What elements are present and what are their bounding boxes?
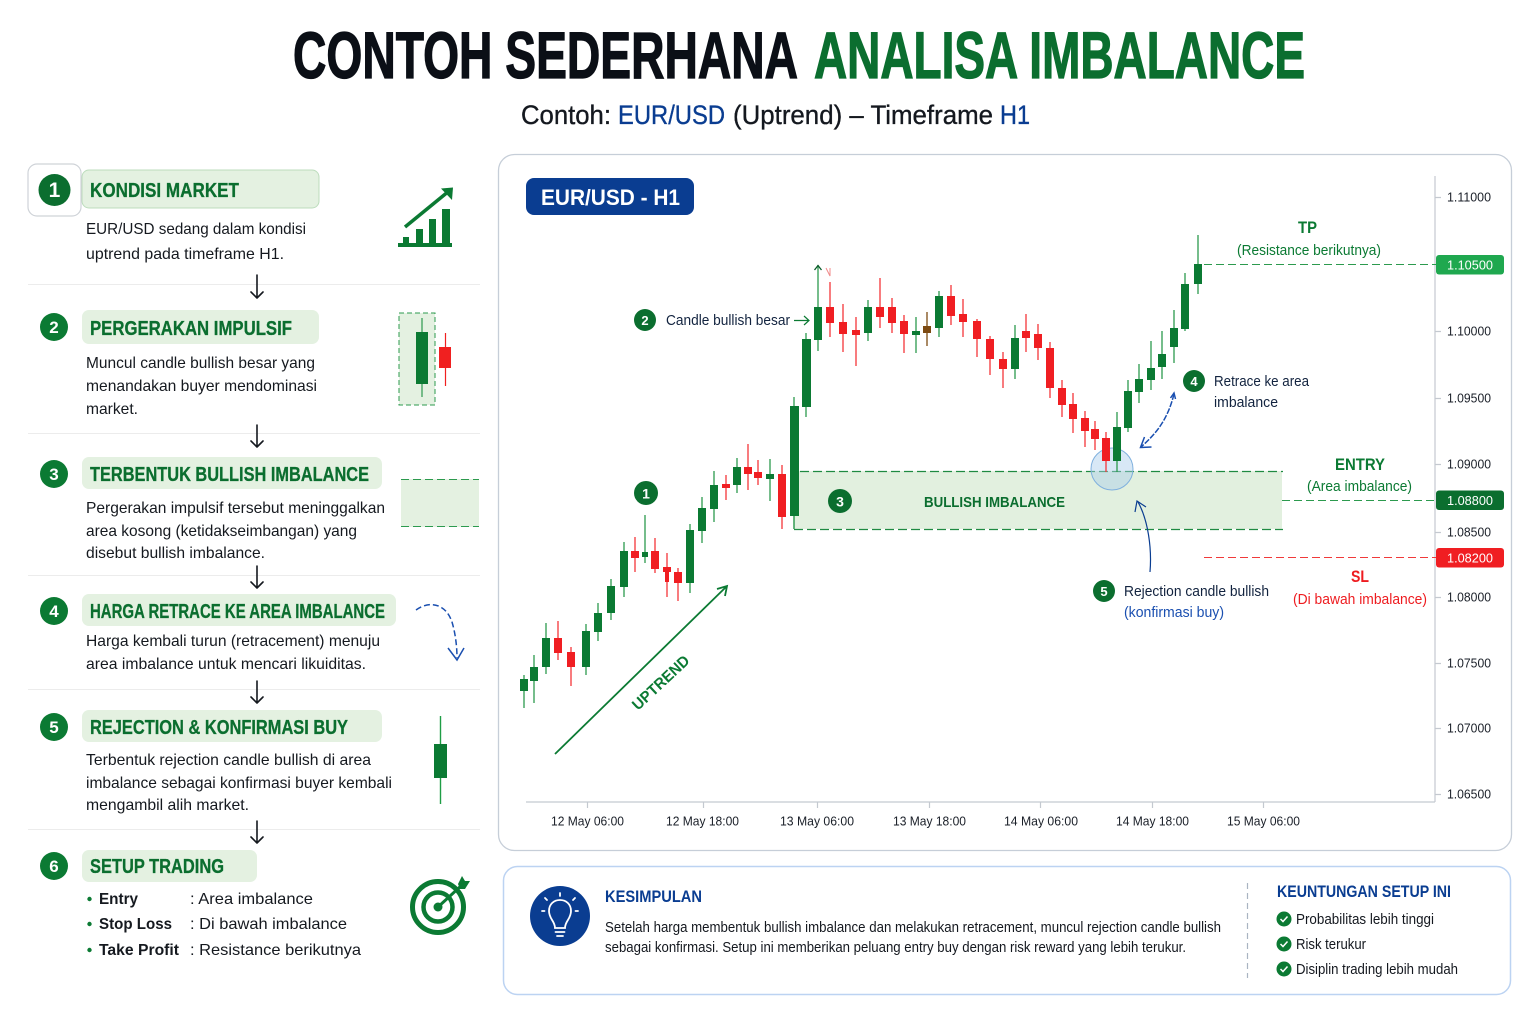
price axis: 1.09000	[1447, 456, 1491, 472]
title: CONTOH SEDERHANA	[293, 18, 798, 92]
annotation 1	[634, 481, 658, 505]
stop loss level: 1.08200	[1447, 550, 1493, 566]
step 1: kondisi market: uptrend pada timeframe H1.	[86, 246, 284, 263]
uptrend arrow and label	[555, 586, 727, 754]
benefits list	[1276, 882, 1458, 978]
step 5: rejection dan konfirmasi: imbalance sebagai konfirmasi buyer kembali	[86, 775, 392, 792]
step 6: setup trading: 6	[49, 857, 59, 876]
icon: retrace arrow	[416, 605, 464, 660]
step 4: harga retrace: Harga kembali turun (retracement) menuju	[86, 633, 380, 650]
annotation 4: retrace ke area imbalance: Retrace ke area	[1214, 374, 1310, 390]
panel: kesimpulan	[504, 866, 1510, 994]
step 3: terbentuk bullish imbalance	[40, 457, 385, 562]
conclusion text: KESIMPULAN	[605, 887, 702, 906]
step 3: terbentuk bullish imbalance: TERBENTUK BULLISH IMBALANCE	[90, 464, 369, 486]
step 6: setup trading: SETUP TRADING	[90, 856, 224, 878]
bullish imbalance zone: 3	[836, 494, 844, 510]
step 3: terbentuk bullish imbalance: 3	[49, 465, 59, 484]
step 4: harga retrace: 4	[49, 602, 59, 621]
icon: impulse candle	[399, 313, 451, 405]
candlestick chart	[520, 235, 1202, 708]
annotation 2: candle bullish besar: Candle bullish besar	[666, 313, 790, 329]
annotation 4: retrace ke area imbalance: 4	[1190, 374, 1198, 389]
icon: target	[412, 876, 470, 932]
price axis: 1.07500	[1447, 656, 1491, 670]
time axis: 13 May 06:00	[780, 814, 854, 828]
step 5: rejection dan konfirmasi: mengambil alih market.	[86, 797, 249, 814]
annotation 2: candle bullish besar: 2	[641, 313, 649, 328]
benefits list: Risk terukur	[1296, 937, 1366, 953]
step 5: rejection dan konfirmasi: REJECTION & KONFIRMASI BUY	[90, 717, 349, 739]
rejection highlight circle	[1091, 448, 1133, 490]
annotation 5: rejection candle bullish	[1093, 501, 1269, 621]
step 2: pergerakan impulsif: menandakan buyer mendominasi	[86, 378, 317, 395]
panel: langkah analisa	[28, 164, 480, 959]
annotation 5: rejection candle bullish: Rejection candle bullish	[1124, 584, 1269, 600]
price axis: 1.10000	[1447, 324, 1491, 338]
TP level: 1.10500	[1447, 258, 1493, 272]
step 5: rejection dan konfirmasi	[40, 710, 392, 814]
price axis	[1435, 176, 1491, 802]
step 5: rejection dan konfirmasi: 5	[49, 718, 59, 737]
step 6: setup trading: Entry	[99, 891, 138, 908]
conclusion text: sebagai konfirmasi. Setup ini memberikan peluang entry buy dengan risk reward yang lebih terukur.	[605, 940, 1186, 956]
price axis: 1.11000	[1447, 190, 1491, 204]
entry level	[1282, 455, 1504, 510]
conclusion text	[605, 887, 1221, 956]
entry level: (Area imbalance)	[1307, 479, 1412, 495]
arrow	[251, 425, 263, 447]
stop loss level: (Di bawah imbalance)	[1293, 592, 1427, 608]
icon: growth chart	[398, 188, 453, 247]
arrow	[251, 821, 263, 843]
subtitle	[521, 100, 1030, 130]
subtitle: H1	[1000, 100, 1030, 130]
price axis: 1.09500	[1447, 390, 1491, 406]
step 3: terbentuk bullish imbalance: Pergerakan impulsif tersebut meninggalkan	[86, 500, 385, 517]
annotation 5: rejection candle bullish: 5	[1100, 584, 1108, 599]
step 3: terbentuk bullish imbalance: area kosong (ketidakseimbangan) yang	[86, 523, 357, 540]
price axis: 1.08000	[1447, 590, 1491, 604]
step 6: setup trading: : Resistance berikutnya	[190, 942, 361, 959]
annotation 2: candle bullish besar	[634, 309, 809, 331]
step 4: harga retrace: HARGA RETRACE KE AREA IMBALANCE	[90, 601, 385, 623]
uptrend arrow and label: UPTREND	[629, 652, 693, 714]
bullish imbalance zone	[794, 471, 1283, 530]
step 1: kondisi market: KONDISI MARKET	[90, 180, 239, 202]
subtitle: Contoh:	[521, 100, 611, 130]
step 2: pergerakan impulsif	[40, 310, 319, 418]
time axis: 15 May 06:00	[1227, 814, 1300, 828]
step 2: pergerakan impulsif: Muncul candle bullish besar yang	[86, 355, 315, 372]
TP level: TP	[1298, 218, 1317, 237]
title: ANALISA IMBALANCE	[814, 18, 1305, 92]
TP level	[1204, 218, 1504, 274]
step 6: setup trading: Take Profit	[99, 942, 180, 959]
benefits list: Disiplin trading lebih mudah	[1296, 962, 1458, 978]
price axis: 1.08500	[1447, 524, 1491, 540]
step 4: harga retrace: area imbalance untuk mencari likuiditas.	[86, 656, 366, 673]
benefits list: KEUNTUNGAN SETUP INI	[1277, 882, 1451, 901]
benefits list: Probabilitas lebih tinggi	[1296, 912, 1434, 928]
price axis: 1.06500	[1447, 786, 1491, 802]
step 1: kondisi market: EUR/USD sedang dalam kondisi	[86, 221, 306, 238]
time axis: 12 May 18:00	[666, 814, 739, 828]
chart badge: EUR/USD - H1	[526, 178, 694, 215]
step 6: setup trading: : Di bawah imbalance	[190, 916, 347, 933]
annotation 5: rejection candle bullish: (konfirmasi buy)	[1124, 605, 1224, 621]
time axis: 14 May 06:00	[1004, 814, 1078, 828]
arrow	[251, 681, 263, 703]
entry level: 1.08800	[1447, 493, 1493, 508]
icon: light bulb	[530, 886, 590, 946]
step 3: terbentuk bullish imbalance: disebut bullish imbalance.	[86, 545, 265, 562]
step 2: pergerakan impulsif: market.	[86, 401, 138, 418]
icon: imbalance zone	[401, 479, 479, 527]
step 2: pergerakan impulsif: 2	[49, 318, 59, 337]
annotation 4: retrace ke area imbalance	[1140, 370, 1310, 448]
stop loss level: SL	[1351, 567, 1369, 586]
annotation 1: 1	[642, 486, 650, 502]
panel: chart	[498, 154, 1512, 850]
chart badge: EUR/USD - H1: EUR/USD - H1	[541, 185, 680, 210]
price axis: 1.07000	[1447, 720, 1491, 736]
subtitle: (Uptrend) – Timeframe	[733, 100, 993, 130]
time axis	[526, 802, 1435, 828]
TP level: (Resistance berikutnya)	[1237, 243, 1381, 259]
step 2: pergerakan impulsif: PERGERAKAN IMPULSIF	[90, 318, 292, 340]
subtitle: EUR/USD	[618, 100, 725, 130]
arrow	[251, 566, 263, 588]
time axis: 12 May 06:00	[551, 814, 624, 828]
step 4: harga retrace	[40, 594, 396, 673]
step 1: kondisi market	[28, 164, 319, 263]
conclusion text: Setelah harga membentuk bullish imbalance dan melakukan retracement, muncul rejection candle bullish	[605, 920, 1221, 936]
arrow	[251, 275, 263, 298]
step 6: setup trading: Stop Loss	[99, 916, 172, 933]
stop loss level	[1204, 548, 1504, 608]
time axis: 13 May 18:00	[893, 814, 966, 828]
step 6: setup trading	[40, 850, 361, 959]
icon: rejection candle	[434, 716, 447, 804]
annotation 4: retrace ke area imbalance: imbalance	[1214, 395, 1278, 411]
entry level: ENTRY	[1335, 455, 1386, 474]
bullish imbalance zone: BULLISH IMBALANCE	[924, 494, 1065, 511]
time axis: 14 May 18:00	[1116, 814, 1189, 828]
step 1: kondisi market: 1	[49, 179, 61, 202]
step 5: rejection dan konfirmasi: Terbentuk rejection candle bullish di area	[86, 752, 371, 769]
step 6: setup trading: : Area imbalance	[190, 891, 313, 908]
